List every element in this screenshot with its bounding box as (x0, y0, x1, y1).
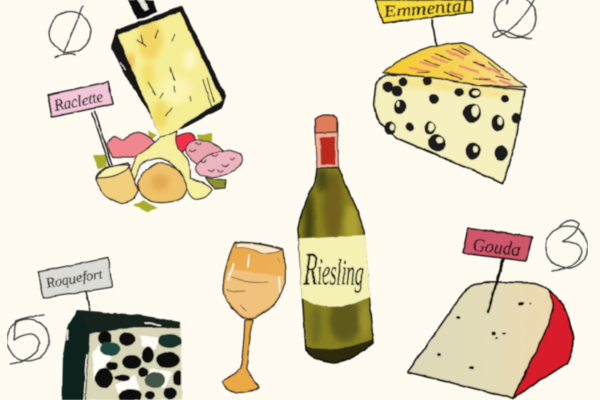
icon: hole highlights (390, 90, 502, 152)
post (432, 20, 438, 55)
roquefort illustration (38, 258, 183, 400)
icon: holes (383, 77, 520, 160)
icon: melted cheese stream (129, 131, 212, 199)
icon: bottle body (298, 167, 373, 363)
icon: bottle capsule (315, 131, 339, 168)
sign post (92, 111, 112, 167)
icon: rind stripes (410, 46, 512, 85)
icon: raclette pan (111, 6, 226, 137)
icon: rind highlights (67, 312, 160, 400)
label: Riesling: Riesling (303, 243, 364, 295)
icon: ham slices (107, 132, 155, 157)
icon: capsule red wash (320, 137, 336, 165)
icon: potato shading (151, 174, 169, 190)
number 5 (7, 315, 49, 364)
icon: bottle cap (315, 115, 337, 133)
icon: salami slices (182, 134, 245, 189)
icon: scraper handle (128, 0, 157, 20)
icon: dark rind side (62, 310, 90, 400)
icon: dark rind top (77, 310, 180, 334)
label: Gouda: Gouda (471, 235, 521, 261)
icon: melted cheese on pan (117, 11, 223, 138)
icon: cheese rind top (383, 43, 527, 87)
icon: melted cheese lines (137, 30, 214, 116)
icon: wine in glass (224, 269, 284, 317)
icon: potato slice (96, 165, 130, 178)
label: Roquefort: Roquefort (44, 266, 105, 292)
label: Emmental (375, 0, 473, 23)
label: Gouda (463, 228, 532, 261)
wine glass (222, 242, 285, 393)
icon: cheese front (86, 324, 182, 400)
label: Raclette: Raclette (52, 89, 105, 115)
wine bottle (296, 114, 375, 365)
icon: rind edge on face (385, 78, 520, 97)
icon: green leaves (93, 131, 212, 212)
number 3 (546, 220, 588, 271)
gouda illustration (408, 228, 573, 398)
icon: blue veins (92, 331, 183, 400)
label: Riesling (299, 235, 370, 307)
icon: red rind (513, 290, 573, 398)
icon: potatoes (96, 163, 186, 203)
post (86, 291, 90, 311)
icon: pan hatch (120, 20, 218, 113)
icon: bottle outline (298, 167, 373, 363)
icon: cheese face (408, 282, 553, 398)
icon: strawberry (175, 133, 197, 152)
emmental illustration (374, 0, 527, 183)
number 2 (492, 0, 536, 38)
icon: specks (437, 302, 531, 370)
label: Raclette (48, 82, 113, 117)
icon: stem and foot (222, 320, 259, 393)
icon: glass bowl (223, 242, 285, 319)
icon: cheese face (374, 75, 525, 183)
icon: highlights and sketch lines (226, 255, 280, 311)
icon: glass rim (236, 243, 282, 253)
label: Roquefort (38, 258, 112, 298)
post (488, 260, 503, 312)
raclette illustration (48, 0, 245, 212)
number 1 (50, 6, 90, 57)
